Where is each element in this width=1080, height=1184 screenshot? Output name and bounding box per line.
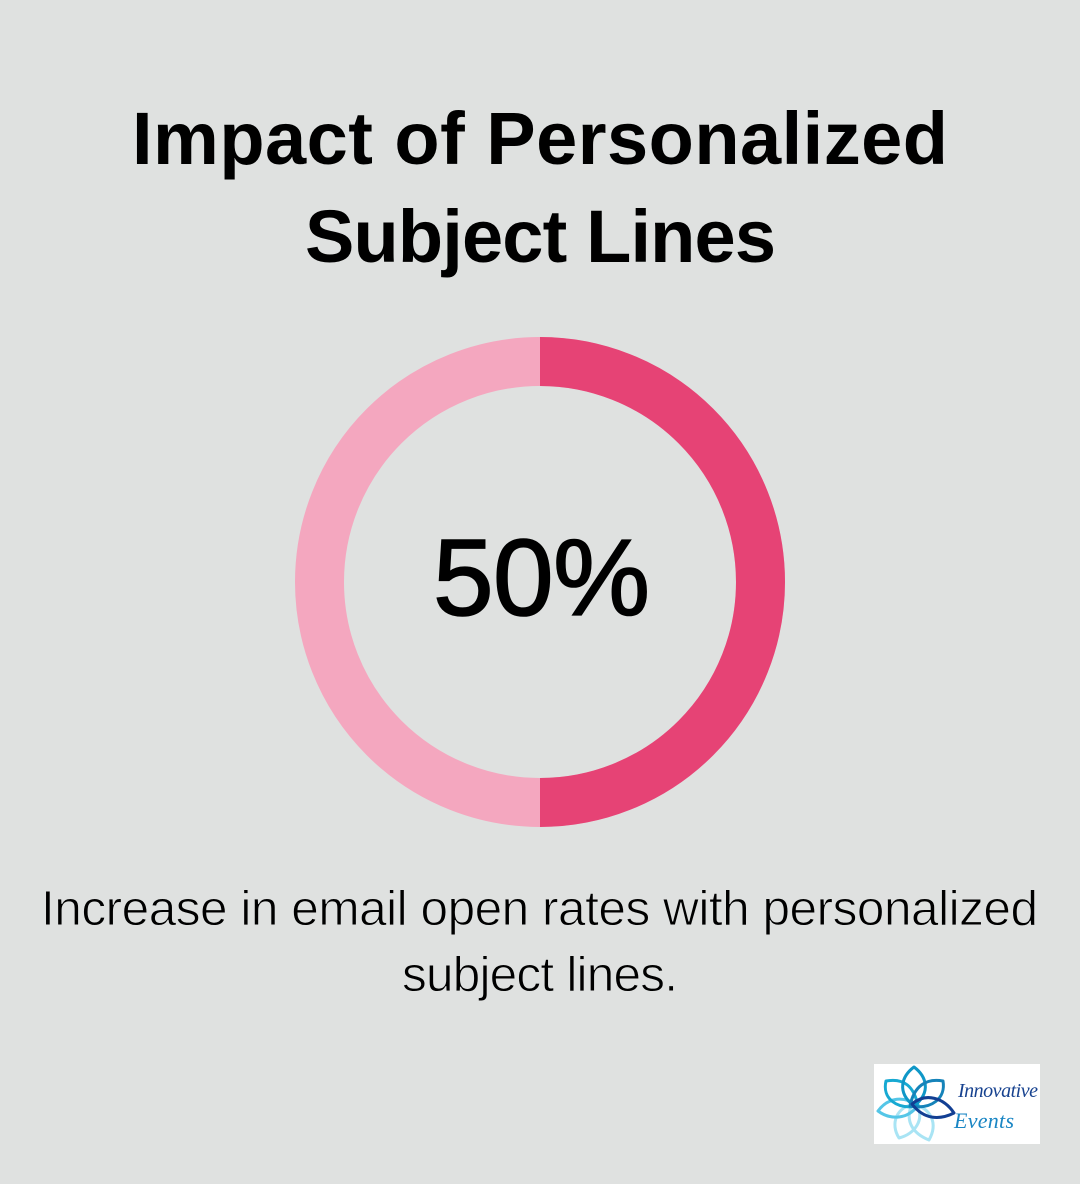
description text: subject lines. <box>402 947 678 1002</box>
icon: flower <box>878 1067 954 1140</box>
title: Subject Lines <box>305 195 776 278</box>
logo wordmark: Events <box>953 1108 1014 1133</box>
logo: Innovative Events <box>874 1064 1040 1144</box>
description text <box>41 881 1038 1002</box>
title <box>132 97 948 278</box>
description text: Increase in email open rates with personalized <box>41 881 1038 936</box>
logo wordmark: Innovative <box>957 1080 1038 1102</box>
title: Impact of Personalized <box>132 97 948 180</box>
donut chart: 50% <box>320 362 760 802</box>
logo wordmark <box>953 1080 1038 1133</box>
value: 50%: 50% <box>433 517 650 639</box>
